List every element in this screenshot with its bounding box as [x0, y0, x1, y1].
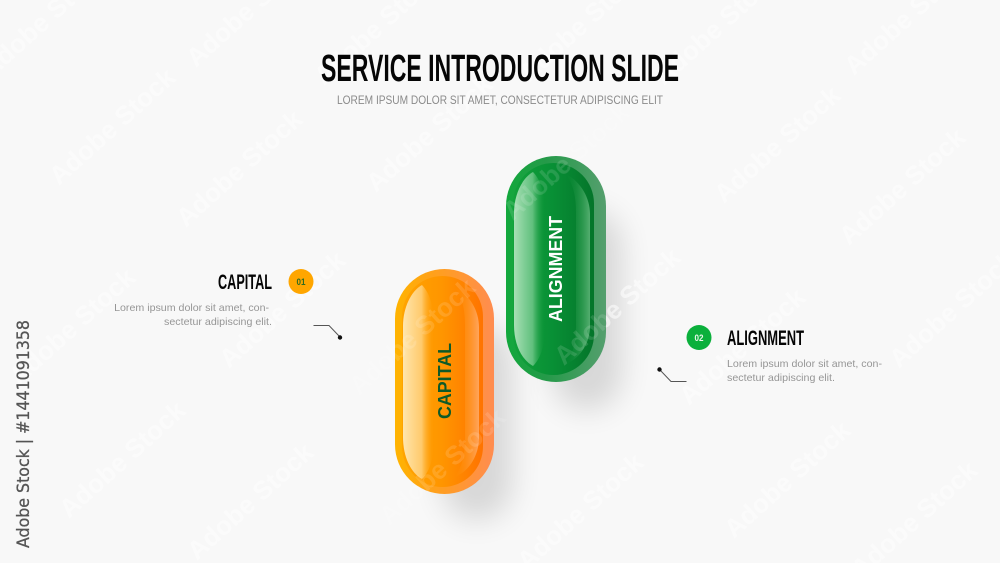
watermark pattern: Adobe Stock — [718, 415, 856, 544]
watermark pattern: Adobe Stock — [3, 262, 141, 391]
heading: alignment: ALIGNMENT — [727, 327, 804, 350]
body text: capital: Lorem ipsum dolor sit amet, con- — [114, 302, 270, 314]
callout: capital — [114, 269, 314, 328]
heading: capital: CAPITAL — [218, 271, 272, 294]
callout: alignment — [686, 325, 885, 384]
body text: alignment: sectetur adipiscing elit. — [727, 372, 835, 384]
watermark over capsules: Adobe Stock — [373, 402, 511, 531]
badge: 02: 02 — [694, 333, 704, 344]
capsule: capital — [395, 269, 494, 494]
badge: 01 — [288, 269, 314, 294]
watermark pattern: Adobe Stock — [708, 80, 846, 209]
capsule shadow: orange — [442, 325, 512, 520]
capsule shadow: green — [552, 210, 622, 410]
watermark over capsules: Adobe Stock — [548, 242, 686, 371]
watermark over capsules — [343, 97, 686, 531]
watermark pattern: Adobe Stock — [53, 395, 191, 524]
subtitle: LOREM IPSUM DOLOR SIT AMET, CONSECTETUR ADIPISCING ELIT — [337, 95, 663, 107]
watermark pattern: Adobe Stock — [181, 437, 319, 563]
watermark over capsules: Adobe Stock — [343, 272, 481, 401]
watermark pattern: Adobe Stock — [673, 282, 811, 411]
badge: 01: 01 — [296, 277, 306, 288]
capsule label: alignment: ALIGNMENT — [546, 216, 566, 322]
watermark pattern: Adobe Stock — [43, 62, 181, 191]
watermark pattern: Adobe Stock — [213, 245, 351, 374]
watermark pattern: Adobe Stock — [170, 104, 308, 233]
body text: alignment: Lorem ipsum dolor sit amet, con- — [727, 358, 882, 370]
connector: capital — [314, 326, 342, 340]
body text: capital: sectetur adipiscing elit. — [164, 316, 272, 328]
capsule label: capital: CAPITAL — [435, 343, 455, 419]
watermark pattern: Adobe Stock — [833, 122, 971, 251]
stock id label: Adobe Stock | #1441091358 — [14, 320, 34, 548]
capsule: alignment — [506, 156, 606, 382]
watermark pattern: Adobe Stock — [548, 242, 686, 371]
badge: 02 — [686, 325, 712, 350]
watermark pattern: Adobe Stock — [360, 69, 498, 198]
watermark over capsules: Adobe Stock — [497, 97, 635, 226]
title: SERVICE INTRODUCTION SLIDE — [321, 48, 679, 90]
connector: alignment — [657, 367, 686, 382]
